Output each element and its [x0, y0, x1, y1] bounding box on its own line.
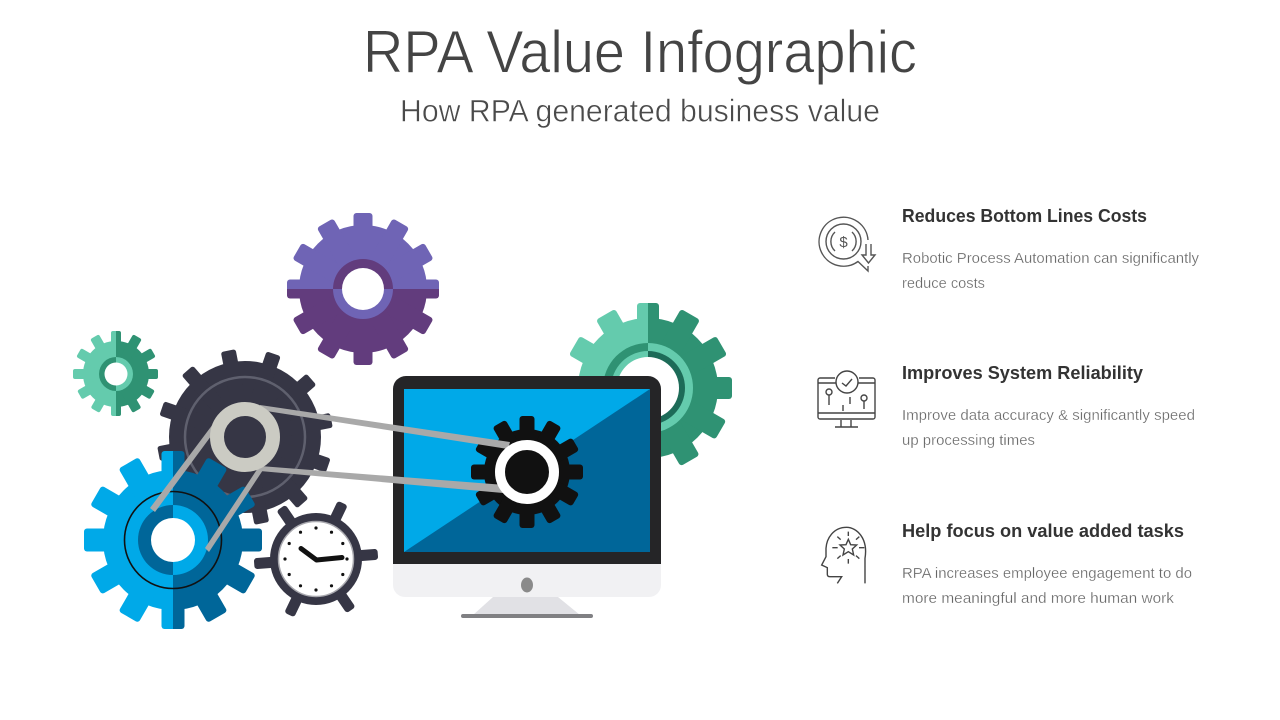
body text	[902, 250, 1199, 292]
benefit: value added tasks	[822, 520, 1192, 607]
body text: Robotic Process Automation can significantly	[902, 250, 1199, 267]
body text: up processing times	[902, 432, 1035, 449]
screen gear hub	[500, 445, 554, 499]
small green gear	[73, 331, 158, 416]
icon: monitor with check	[818, 371, 875, 427]
body text: Improve data accuracy & significantly speed	[902, 407, 1195, 424]
dark gear	[133, 325, 357, 549]
purple gear	[287, 213, 439, 365]
large green gear	[563, 303, 732, 472]
benefit: improves reliability	[818, 362, 1195, 449]
body text	[902, 407, 1195, 449]
body text: more meaningful and more human work	[902, 590, 1175, 607]
heading: Reduces Bottom Lines Costs	[902, 205, 1147, 226]
blue gear	[84, 451, 262, 629]
heading: Improves System Reliability	[902, 362, 1144, 383]
title: RPA Value Infographic	[363, 18, 917, 86]
monitor	[393, 376, 661, 618]
belts	[150, 405, 510, 552]
clock gear	[254, 501, 378, 617]
monitor stand	[461, 597, 593, 618]
body text	[902, 565, 1192, 607]
icon: head with star	[822, 527, 866, 583]
belt pulley	[217, 409, 273, 465]
body text: RPA increases employee engagement to do	[902, 565, 1192, 582]
heading: Help focus on value added tasks	[902, 520, 1184, 541]
gears and monitor illustration	[73, 213, 732, 629]
icon: dollar with down arrow	[819, 217, 875, 271]
black gear on screen	[471, 416, 583, 528]
icon: dollar with down arrow: $	[839, 234, 848, 251]
monitor screen	[404, 389, 650, 552]
subtitle: How RPA generated business value	[400, 92, 880, 128]
body text: reduce costs	[902, 275, 985, 292]
benefit: reduces costs	[819, 205, 1199, 292]
